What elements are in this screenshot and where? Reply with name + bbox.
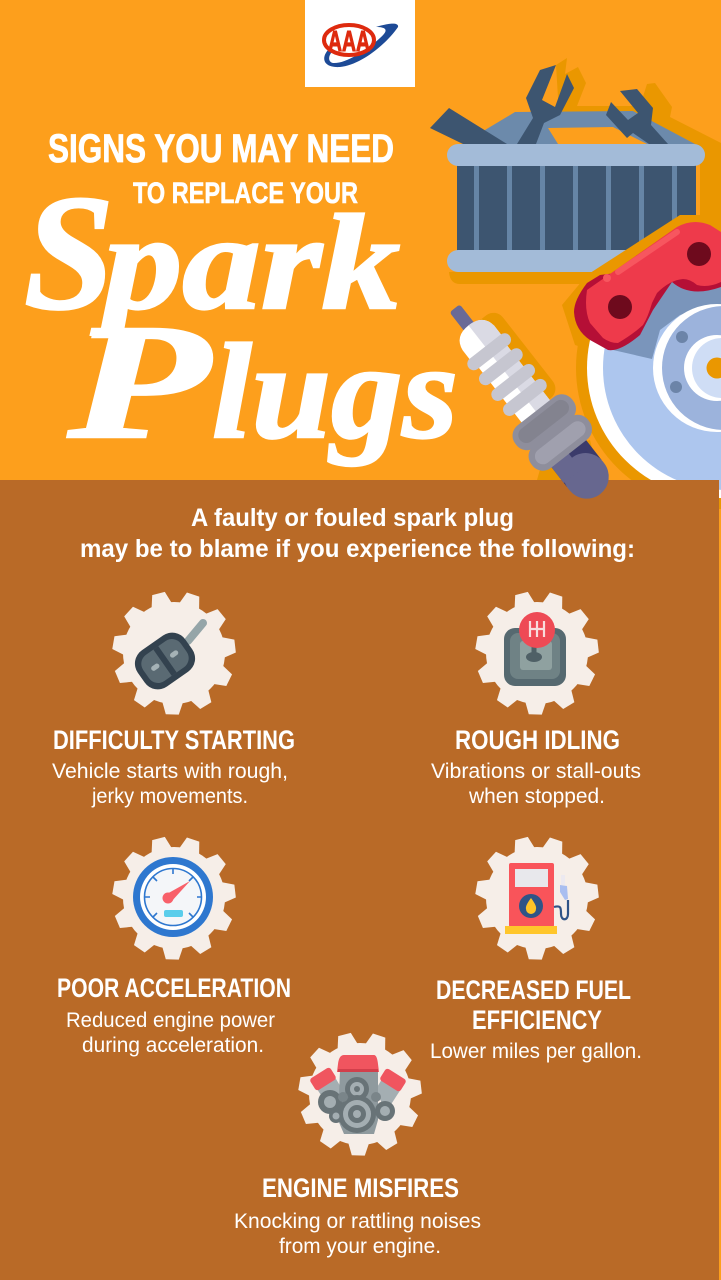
heading: Plugs: P [67,290,212,473]
description: from your engine. [279,1235,441,1258]
heading: signs you may need: SIGNS YOU MAY NEED [48,127,394,171]
description: Vehicle starts with rough, [52,760,288,783]
flat tool [430,108,507,144]
heading: Plugs: lugs [212,317,458,467]
illustration: toolbox with wrenches [430,58,721,284]
item: difficulty starting [52,591,295,808]
logo: AAA: AAA [328,26,370,58]
description: jerky movements. [91,785,248,808]
description [52,760,288,808]
wrench left [517,65,574,144]
handle [485,111,695,144]
box body [457,160,696,255]
logo: AAA [305,0,415,87]
description: Vibrations or stall-outs [431,760,641,783]
description: during acceleration. [82,1034,264,1057]
toolbox shadow [449,58,721,284]
label: ENGINE MISFIRES [262,1173,459,1203]
intro text: may be to blame if you experience the following: [80,535,635,563]
description [234,1210,481,1258]
icon: gear shifter [475,591,599,715]
label: DECREASED FUEL [436,975,631,1005]
heading: to replace your: TO REPLACE YOUR [133,177,358,210]
description: Knocking or rattling noises [234,1210,481,1233]
icon: engine [298,1032,422,1156]
intro text: A faulty or fouled spark plug [191,504,514,532]
label: POOR ACCELERATION [57,973,291,1003]
label: EFFICIENCY [472,1005,602,1035]
description: when stopped. [468,785,605,808]
panel: lower brown section [0,480,719,1280]
caliper [574,260,721,350]
heading: Spark: park [92,188,400,338]
heading: Spark [24,161,400,344]
item: rough idling [431,591,641,808]
description: Reduced engine power [66,1009,275,1032]
item: engine misfires [234,1032,481,1258]
label: DIFFICULTY STARTING [53,725,295,755]
description: Lower miles per gallon. [430,1040,642,1063]
label: ROUGH IDLING [455,725,620,755]
item: decreased fuel efficiency [430,836,642,1063]
icon: speedometer [112,836,236,960]
heading: Plugs [67,290,458,473]
label [436,975,631,1035]
wrench right [606,89,668,144]
illustration: spark plug [427,286,629,516]
heading: Spark: S [24,161,114,344]
icon: car key [112,591,236,715]
description [431,760,641,808]
box rails [447,144,705,166]
description [66,1009,275,1057]
illustration: brake disc and caliper [537,215,721,509]
icon: fuel pump [475,836,599,960]
item: poor acceleration [57,836,291,1057]
intro text [80,504,635,563]
